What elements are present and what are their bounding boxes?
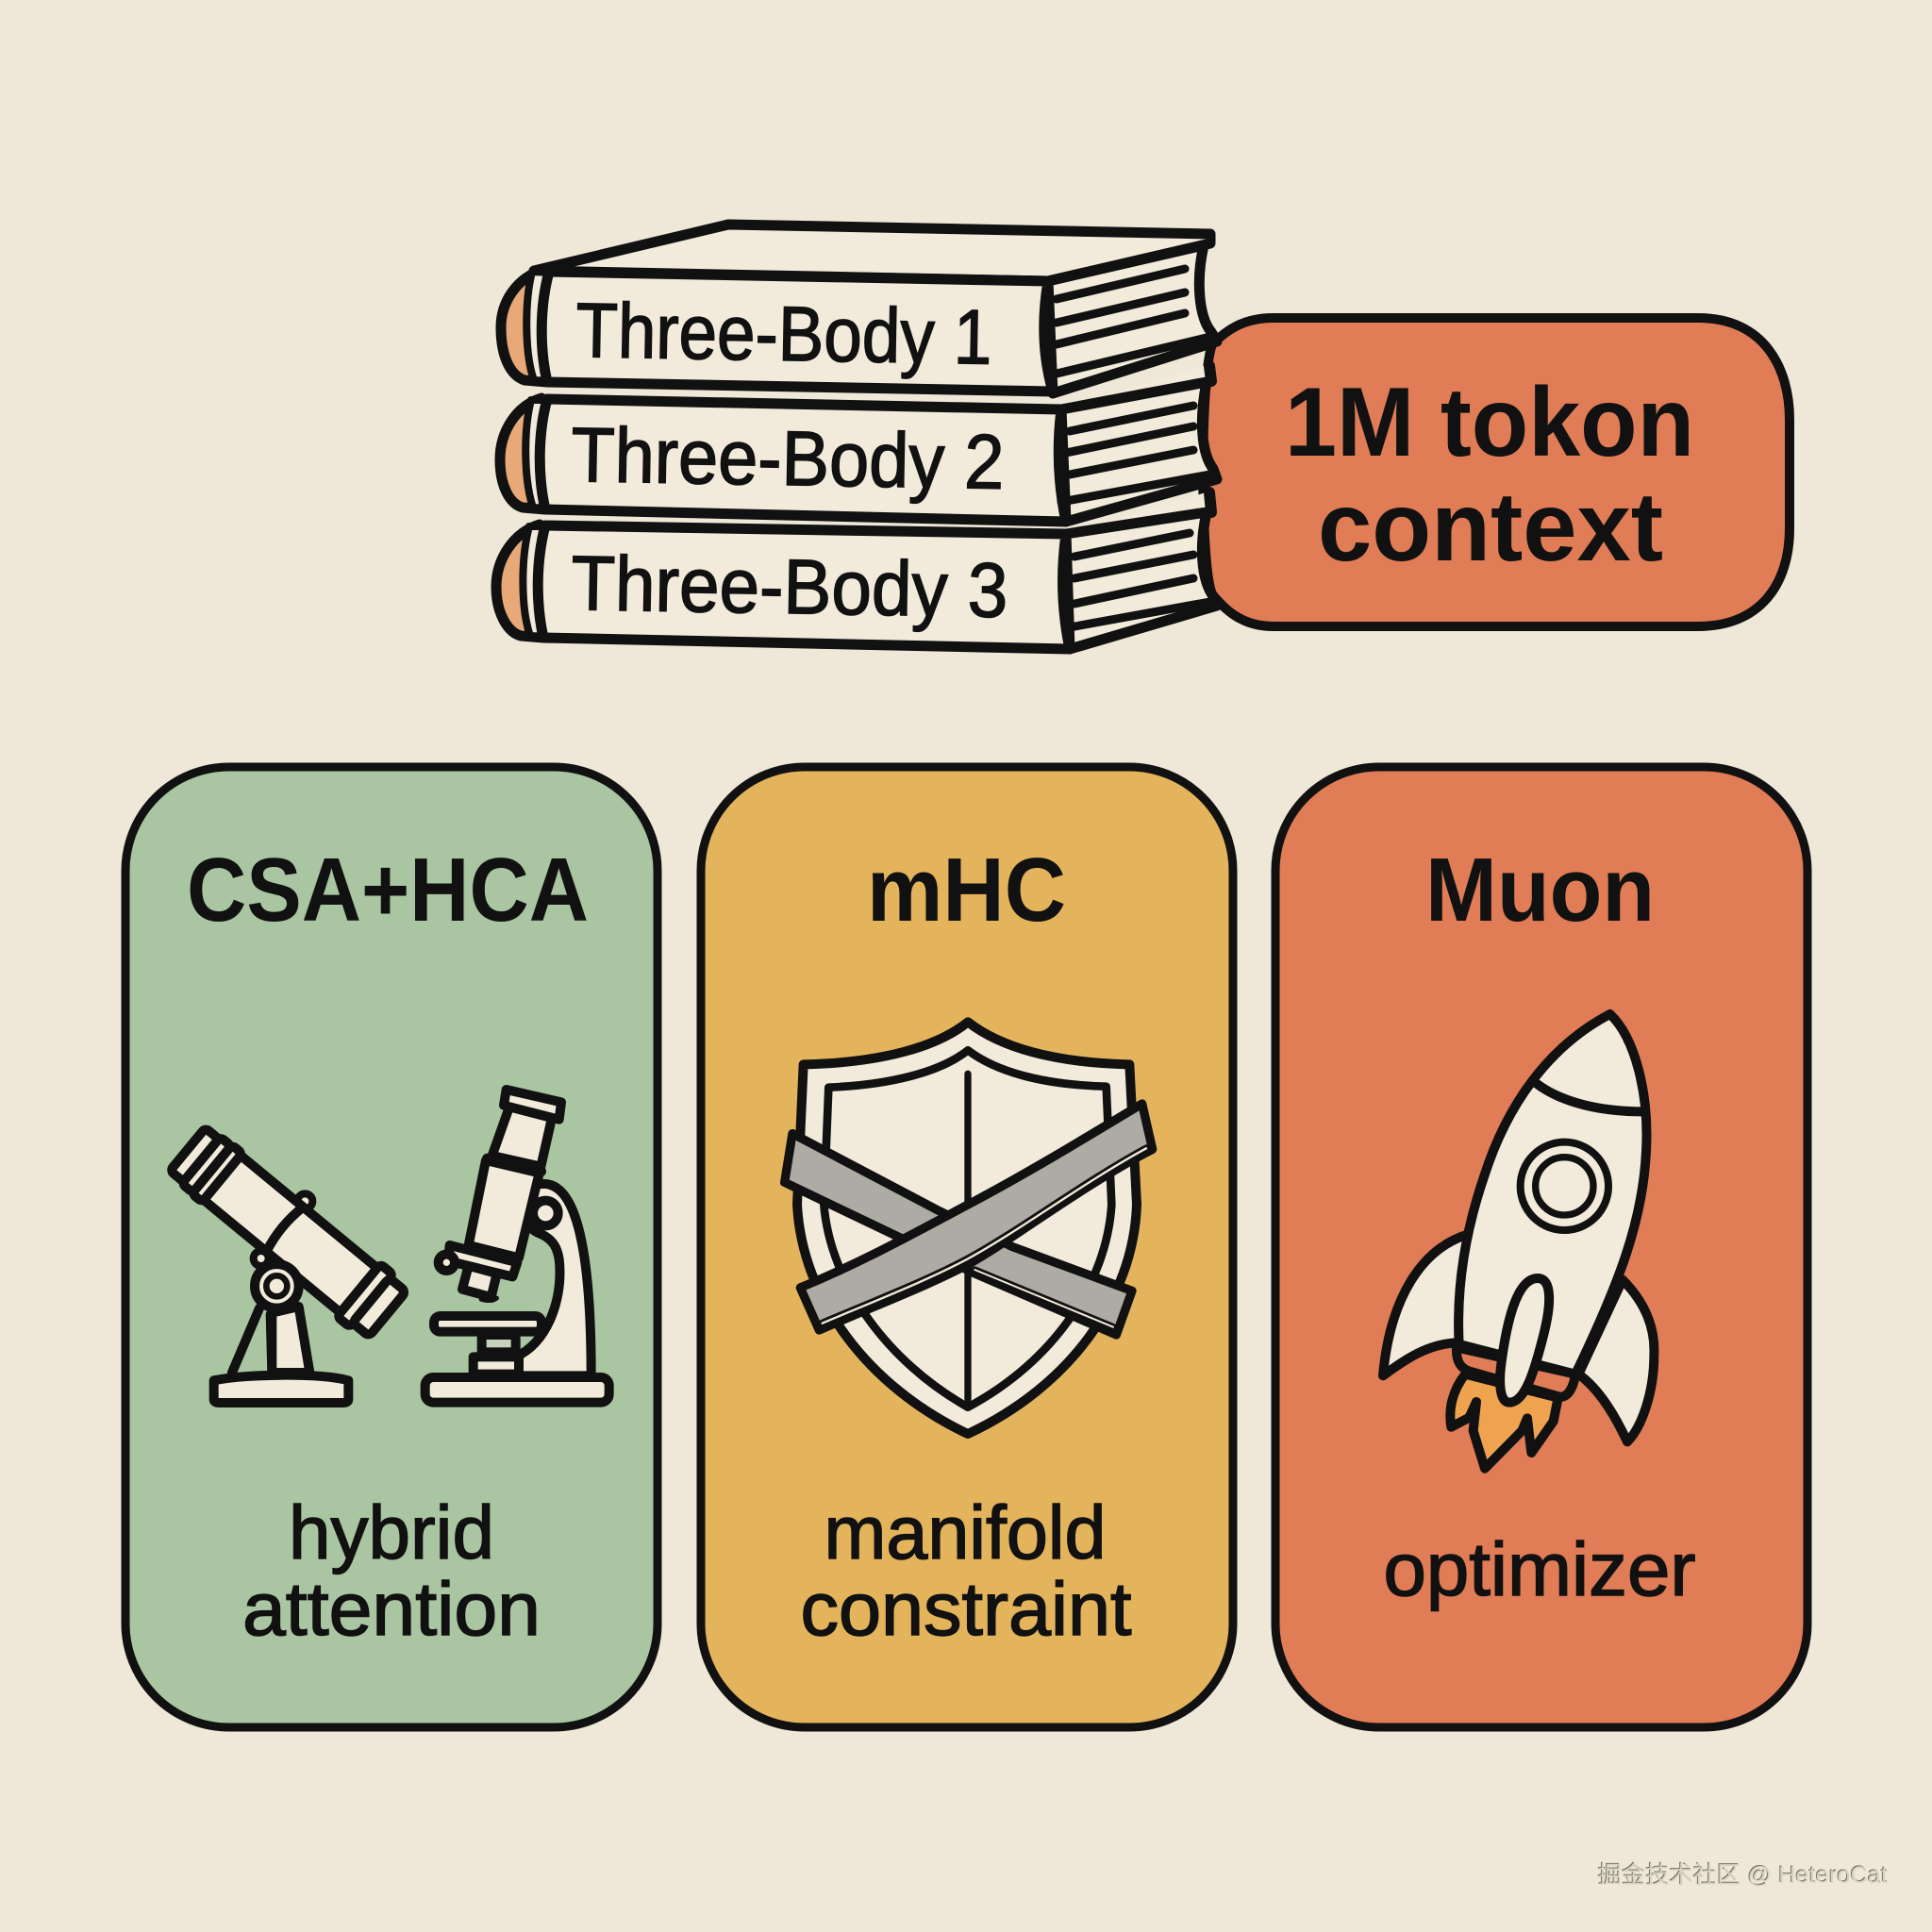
text: optimizer: optimizer [1383, 1527, 1696, 1611]
heading: mHC: mHC [867, 840, 1066, 941]
text: hybrid attention [242, 1491, 541, 1651]
text: hybrid attention: hybrid [289, 1491, 494, 1574]
callout: 1M tokon context [1203, 318, 1790, 626]
panel: CSA+HCA [125, 767, 658, 1727]
panel: mHC [701, 767, 1233, 1727]
book: Three-Body 1: Three-Body 1 [575, 288, 992, 381]
icon: telescope [166, 1124, 409, 1403]
icon: rocket [1383, 1014, 1654, 1469]
watermark: 掘金技术社区 @ HeteroCat [1597, 1861, 1887, 1888]
icon: shield with crossed bands [785, 1022, 1153, 1434]
book: Three-Body 2: Three-Body 2 [571, 412, 1005, 506]
text: manifold constraint: manifold [824, 1491, 1106, 1574]
icon: microscope [425, 1090, 609, 1403]
text: manifold constraint: constraint [800, 1567, 1132, 1651]
book: Three-Body 2 [500, 363, 1217, 522]
text: manifold constraint [800, 1491, 1132, 1651]
panel: Muon [1275, 767, 1807, 1727]
callout: 1M tokon context: 1M tokon [1285, 368, 1694, 477]
heading: Muon: Muon [1425, 840, 1655, 941]
book: Three-Body 3 [496, 491, 1217, 649]
heading: CSA+HCA: CSA+HCA [187, 840, 589, 941]
watermark: 掘金技术社区 @ HeteroCat [1598, 1862, 1888, 1889]
text: hybrid attention: attention [242, 1567, 541, 1651]
book stack [496, 225, 1217, 649]
book: Three-Body 3: Three-Body 3 [571, 541, 1008, 634]
callout: 1M tokon context: context [1318, 473, 1663, 582]
book: Three-Body 1 [501, 225, 1217, 393]
